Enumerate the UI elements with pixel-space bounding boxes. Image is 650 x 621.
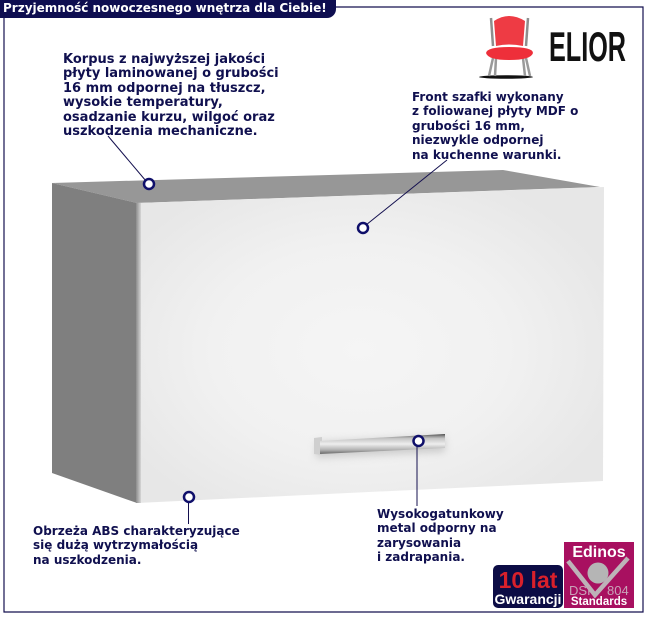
text: front (412, 90, 578, 162)
cabinet front (137, 187, 604, 503)
text: metal: zarysowania (377, 536, 461, 550)
icon: chair logo (479, 16, 533, 79)
text: ABS edges: Obrzeża ABS charakteryzujące (33, 524, 240, 538)
text: ABS edges (33, 524, 240, 567)
text: ABS edges: się dużą wytrzymałością (33, 538, 198, 552)
badge: Edinos standards: 804 (607, 583, 629, 598)
text: korpus: płyty laminowanej o grubości (63, 66, 279, 81)
callout: korpus (108, 136, 154, 189)
text: front: grubości 16 mm, (412, 119, 525, 133)
text: korpus: uszkodzenia mechaniczne. (63, 124, 258, 139)
text: metal (377, 507, 504, 564)
handle (314, 434, 445, 458)
callout: front (358, 160, 447, 233)
cabinet front edge (136, 203, 141, 503)
logo wordmark: ELIOR (549, 23, 626, 70)
text: metal: Wysokogatunkowy (377, 507, 504, 521)
cabinet side (52, 183, 137, 503)
text: metal: metal odporny na (377, 521, 497, 535)
badge: Edinos standards (564, 542, 634, 608)
text: metal: i zadrapania. (377, 550, 465, 564)
badge: Edinos standards: DSI (569, 583, 591, 598)
text: front: na kuchenne warunki. (412, 148, 561, 162)
text: front: niezwykle odpornej (412, 133, 543, 147)
text: ABS edges: na uszkodzenia. (33, 553, 141, 567)
banner heading: Przyjemność nowoczesnego wnętrza dla Ciebie! (3, 1, 327, 15)
text: korpus: Korpus z najwyższej jakości (63, 52, 265, 67)
text: front: z foliowanej płyty MDF o (412, 104, 578, 118)
callout: ABS edges (184, 492, 194, 524)
text: korpus: osadzanie kurzu, wilgoć oraz (63, 110, 275, 125)
callout: metal handle (414, 436, 424, 506)
cabinet top (52, 170, 600, 203)
text: front: Front szafki wykonany (412, 90, 564, 104)
text: korpus: wysokie temperatury, (63, 95, 223, 110)
badge: Edinos standards: Edinos (572, 544, 626, 561)
badge: 10 lat warranty: Gwarancji (495, 591, 561, 607)
badge: 10 lat warranty (493, 565, 563, 608)
text: korpus: 16 mm odpornej na tłuszcz, (63, 81, 266, 96)
badge: Edinos standards: Standards (571, 596, 627, 608)
text: korpus (63, 52, 279, 139)
badge: 10 lat warranty: 10 lat (499, 567, 557, 593)
